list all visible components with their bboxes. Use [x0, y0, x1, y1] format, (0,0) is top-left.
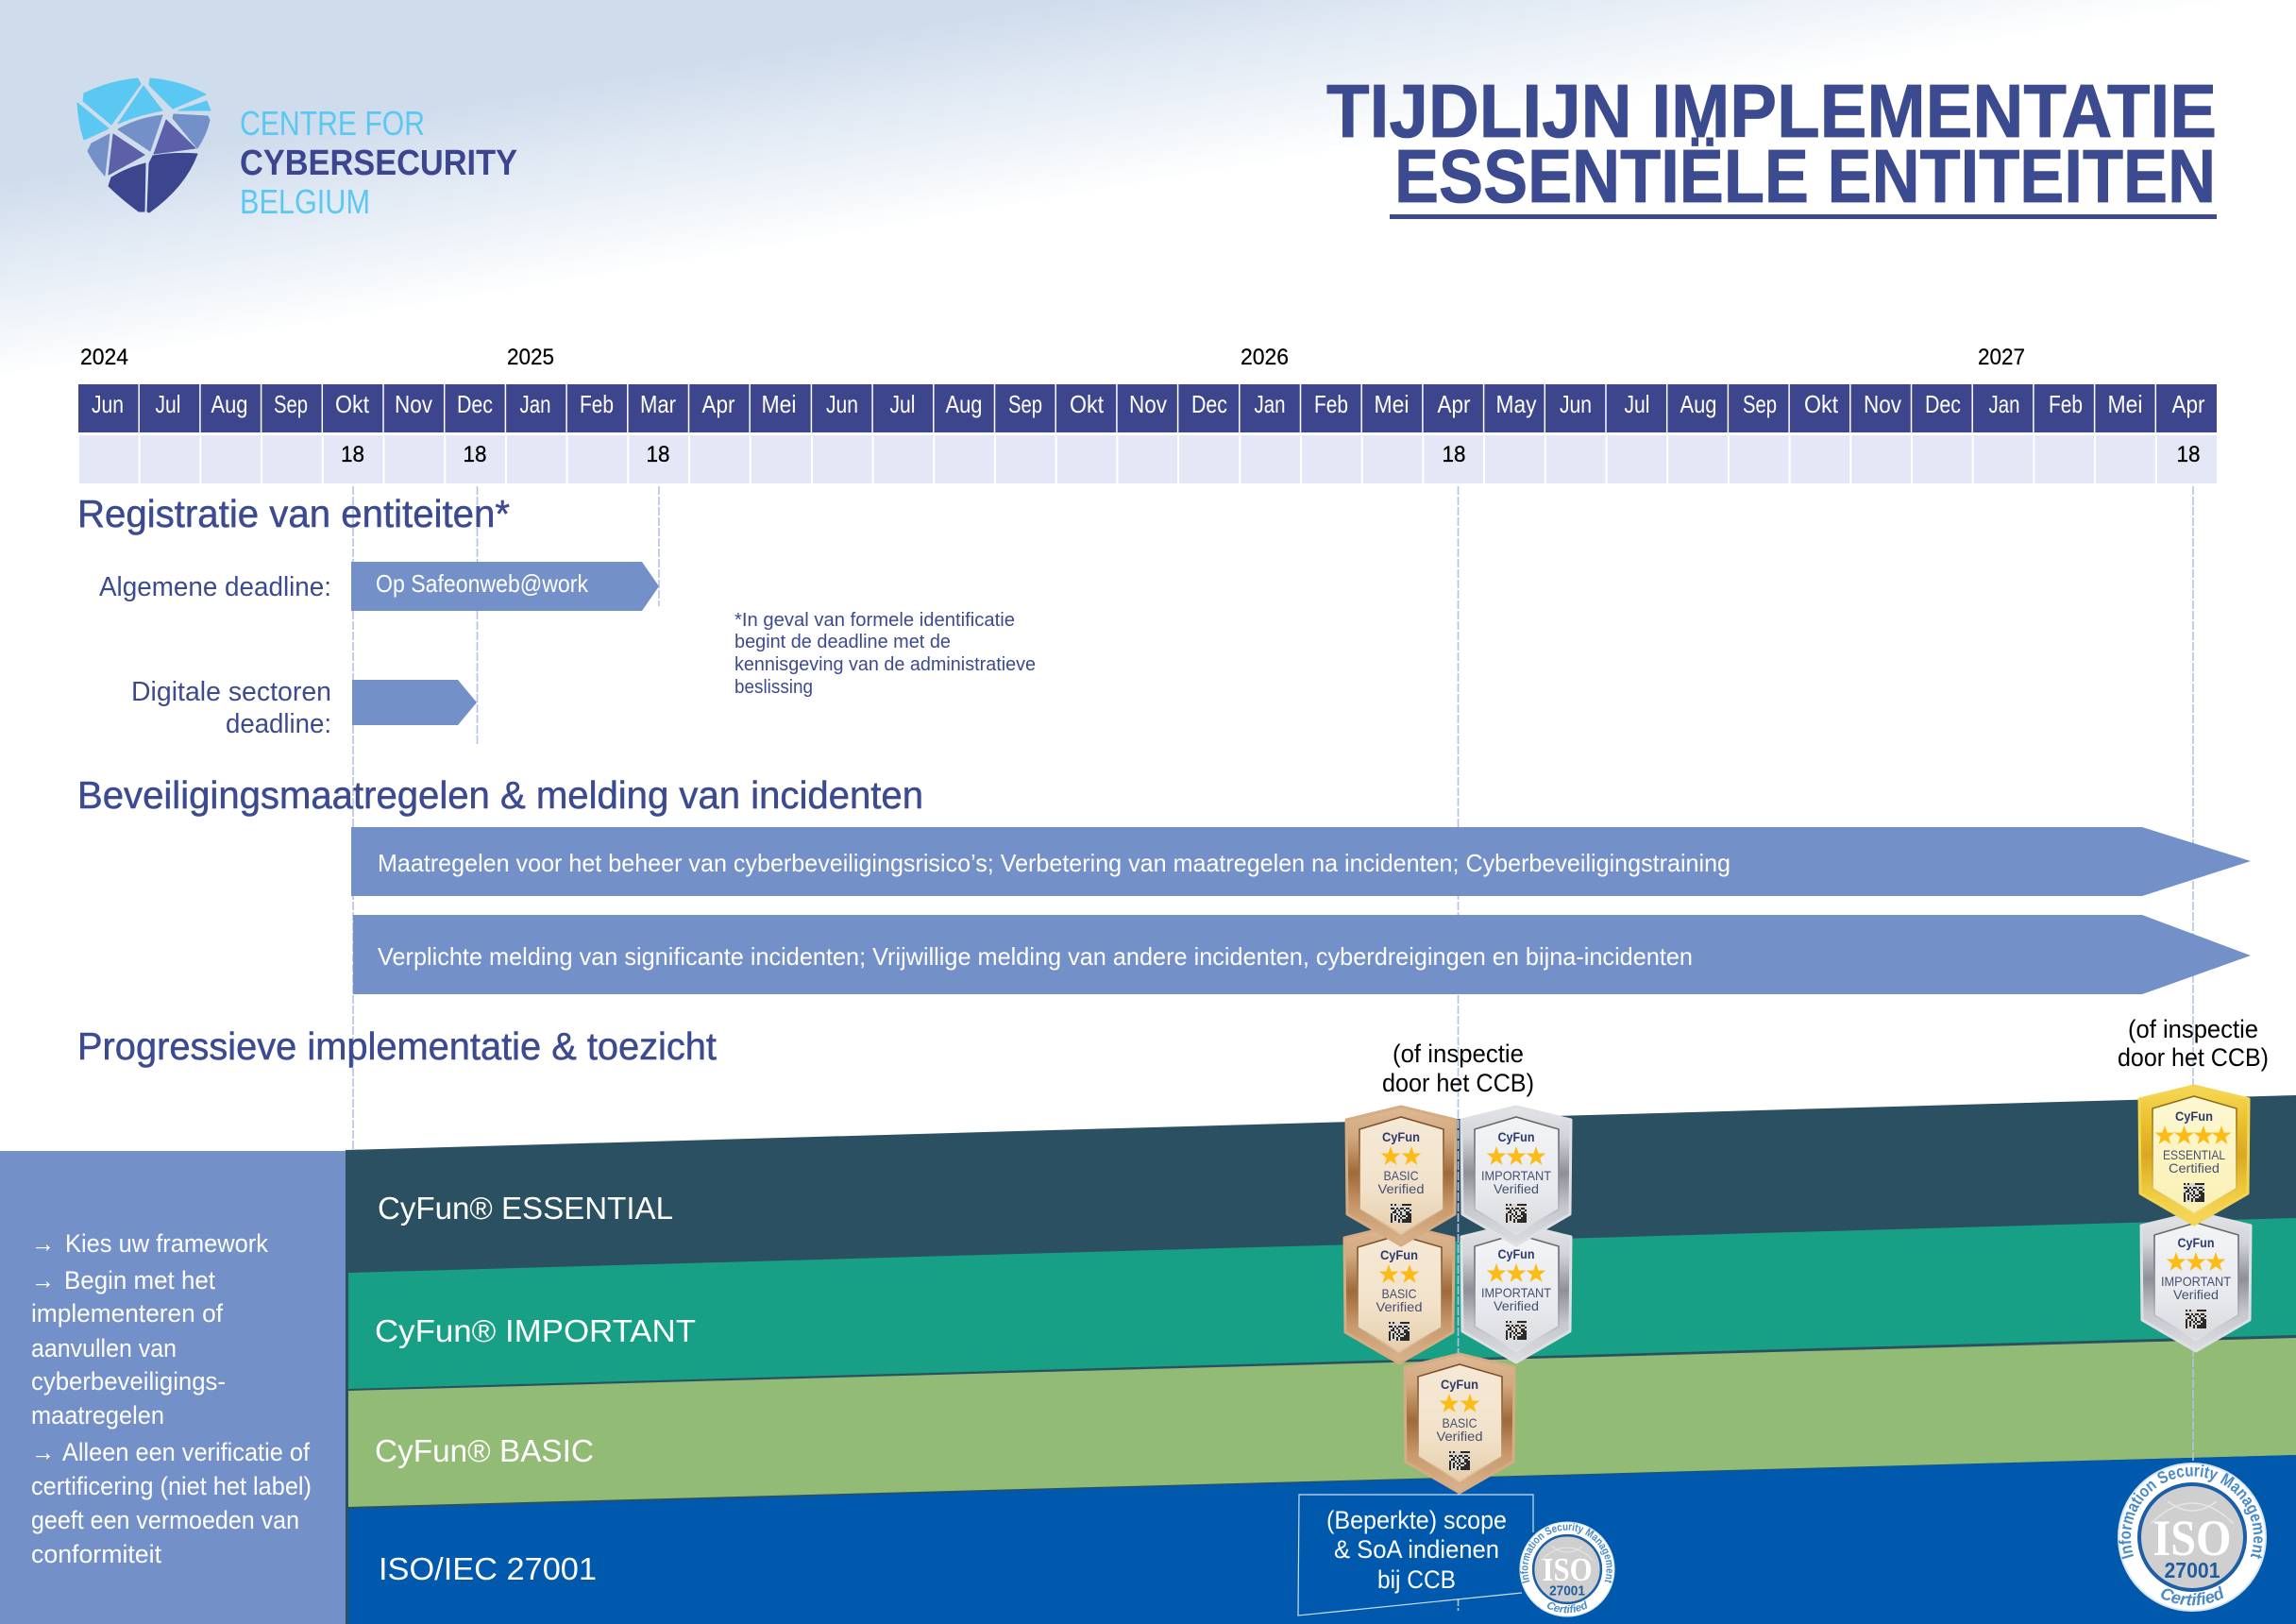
month header row: Apr	[702, 390, 735, 418]
arrow label: Op Safeonweb@work	[376, 569, 589, 598]
left panel text: aanvullen van	[31, 1334, 177, 1362]
badge: basic in essential band	[1346, 1107, 1456, 1245]
bands block: cyfun levels and ISO	[0, 1095, 2296, 1624]
title	[1326, 69, 2217, 219]
callout: scope indienen	[1298, 1495, 1533, 1616]
month header row: Feb	[580, 390, 614, 418]
month header row: Sep	[274, 390, 308, 418]
badge: essential 2027: ESSENTIAL	[2163, 1147, 2225, 1162]
badge: basic in important band: Verified	[1376, 1299, 1422, 1314]
month header row: Mei	[1375, 390, 1409, 418]
arrow: maatregelen	[351, 827, 2251, 896]
left panel text: →	[31, 1229, 55, 1258]
badge: basic in important band: BASIC	[1382, 1286, 1416, 1301]
badge: important 2027: CyFun	[2177, 1235, 2215, 1250]
ISO seal small: Certified	[1547, 1599, 1588, 1613]
callout: scope indienen: & SoA indienen	[1334, 1535, 1499, 1564]
arrow text: melding: Verplichte melding van significante incidenten; Vrijwillige melding van andere incidenten, cyberdreigingen en bijna-incidenten	[378, 942, 1693, 971]
month header row: Nov	[1864, 390, 1901, 418]
month header row: Sep	[1008, 390, 1042, 418]
ISO seal small: 27001	[1549, 1584, 1585, 1599]
badge: important in essential band: Verified	[1494, 1181, 1539, 1196]
month header row: Aug	[946, 390, 982, 418]
month header row: Apr	[1437, 390, 1471, 418]
ISO seal small: ISO	[1542, 1552, 1593, 1588]
year labels: 2025	[507, 345, 554, 370]
badge: basic in essential band: Verified	[1378, 1181, 1424, 1196]
band label: basic: CyFun® BASIC	[375, 1433, 594, 1468]
badge: important in essential band	[1461, 1107, 1571, 1245]
footnote: *In geval van formele identificatie	[734, 610, 1015, 631]
badge: basic in essential band: BASIC	[1384, 1168, 1418, 1183]
badge: essential 2027: CyFun	[2175, 1108, 2213, 1124]
left panel text: Kies uw framework	[65, 1229, 268, 1258]
badge: important in important band: CyFun	[1497, 1246, 1535, 1261]
background gradient header	[0, 0, 2231, 375]
date row: 18	[463, 442, 487, 467]
ISO seal small	[1519, 1522, 1615, 1616]
date row	[79, 435, 2217, 483]
month header row: May	[1495, 390, 1537, 418]
footnote: kennisgeving van de administratieve	[734, 654, 1036, 675]
band label: essential: CyFun® ESSENTIAL	[378, 1191, 673, 1226]
month header row: Mar	[640, 390, 676, 418]
badge: important in important band	[1461, 1224, 1571, 1362]
ISO seal large	[2118, 1463, 2267, 1612]
footnote	[734, 610, 1036, 698]
note: of inspectie 2026: door het CCB)	[1382, 1069, 1534, 1097]
label: algemene deadline: Algemene deadline:	[99, 572, 331, 602]
ISO seal large: 27001	[2164, 1558, 2220, 1582]
month header row: Jun	[92, 390, 124, 418]
band label: iso: ISO/IEC 27001	[379, 1551, 597, 1586]
badge: important in essential band: CyFun	[1497, 1129, 1535, 1144]
heading: registratie: Registratie van entiteiten*	[77, 492, 510, 535]
left panel text: certificering (niet het label)	[31, 1472, 312, 1500]
deadline guide lines	[353, 486, 2193, 1611]
band label: important: CyFun® IMPORTANT	[375, 1313, 696, 1348]
date row: 18	[1443, 442, 1465, 467]
month header row: Aug	[211, 390, 247, 418]
ISO seal large: Certified	[2161, 1585, 2224, 1605]
month header row: Dec	[457, 390, 493, 418]
month header row: Jul	[1624, 390, 1650, 418]
month header row: Jan	[1254, 390, 1286, 418]
month header row: Mei	[2107, 390, 2143, 418]
note: of inspectie 2026	[1382, 1040, 1534, 1097]
heading: beveiligingsmaatregelen: Beveiligingsmaatregelen & melding van incidenten	[77, 773, 923, 817]
icon: shield logo	[77, 78, 211, 212]
date row: 18	[646, 442, 670, 467]
note: of inspectie 2026: (of inspectie	[1393, 1040, 1524, 1068]
month header row: Jun	[826, 390, 858, 418]
month header row: Feb	[2049, 390, 2083, 418]
month header row: Apr	[2171, 390, 2205, 418]
badge: basic in important band: CyFun	[1380, 1247, 1418, 1262]
month header row: Nov	[1129, 390, 1167, 418]
callout: scope indienen: bij CCB	[1377, 1565, 1456, 1594]
left panel text: geeft een vermoeden van	[31, 1506, 299, 1534]
band: CyFun ESSENTIAL	[346, 1095, 2296, 1624]
timeline table	[78, 384, 2217, 483]
badge: important 2027: Verified	[2173, 1287, 2219, 1302]
arrow: melding	[353, 915, 2251, 994]
label: digitale sectoren deadline: deadline:	[226, 709, 331, 739]
year labels: 2027	[1978, 345, 2025, 370]
callout: scope indienen: (Beperkte) scope	[1326, 1506, 1507, 1534]
badge: important in important band: Verified	[1494, 1298, 1539, 1313]
left panel text: maatregelen	[31, 1401, 164, 1429]
note: of inspectie 2027: door het CCB)	[2118, 1043, 2269, 1072]
band: ISO/IEC 27001	[348, 1455, 2296, 1624]
month header row: Jan	[1988, 390, 2020, 418]
badge: basic in basic band: Verified	[1437, 1429, 1482, 1444]
month header row: Jul	[889, 390, 916, 418]
badge: basic in basic band	[1405, 1354, 1514, 1493]
ISO seal large: ISO	[2152, 1510, 2232, 1566]
left panel text: Begin met het	[64, 1266, 215, 1294]
badge: essential 2027: Certified	[2169, 1160, 2220, 1176]
month header row: Dec	[1925, 390, 1961, 418]
label: digitale sectoren deadline	[131, 677, 331, 739]
ISO seal large: Information Security Management	[2119, 1464, 2263, 1560]
month header row: Jan	[519, 390, 551, 418]
badge: basic in basic band: CyFun	[1441, 1377, 1478, 1392]
badge: important in important band: IMPORTANT	[1481, 1285, 1551, 1300]
footnote: begint de deadline met de	[734, 632, 951, 652]
date row: 18	[341, 442, 364, 467]
badge: important 2027: IMPORTANT	[2161, 1274, 2231, 1289]
ISO seal small: Information Security Management	[1520, 1522, 1612, 1583]
arrow: algemene deadline	[351, 562, 659, 611]
left panel text	[31, 1229, 312, 1568]
month header row: Dec	[1191, 390, 1227, 418]
month header row: Jun	[1560, 390, 1592, 418]
band: CyFun BASIC	[348, 1338, 2296, 1507]
title underline	[1390, 214, 2217, 219]
arrow text: maatregelen: Maatregelen voor het beheer van cyberbeveiligingsrisico’s; Verbetering van maatregelen na incidenten; Cyberbeveiligingstraining	[378, 849, 1730, 877]
left panel text: →	[31, 1438, 55, 1466]
label: digitale sectoren deadline: Digitale sectoren	[131, 677, 331, 707]
month header row: Okt	[335, 390, 370, 418]
year labels: 2024	[80, 345, 128, 370]
month header row: Jul	[155, 390, 181, 418]
arrow: digitale sectoren	[352, 680, 477, 725]
logo text: cybersecurity: CYBERSECURITY	[240, 144, 517, 183]
month header row	[78, 384, 2217, 432]
badge: basic in important band	[1344, 1225, 1454, 1363]
month header row: Okt	[1070, 390, 1105, 418]
logo text: centre for: CENTRE FOR	[240, 104, 425, 143]
badge: important 2027	[2141, 1212, 2251, 1351]
footnote: beslissing	[734, 677, 813, 698]
left panel text: →	[31, 1266, 55, 1294]
badge: basic in essential band: CyFun	[1382, 1129, 1420, 1144]
badge: basic in basic band: BASIC	[1443, 1415, 1477, 1430]
month header row: Sep	[1743, 390, 1777, 418]
year labels: 2026	[1241, 345, 1289, 370]
heading: progressieve implementatie: Progressieve implementatie & toezicht	[77, 1024, 718, 1068]
title line 1: TIJDLIJN IMPLEMENTATIE	[1326, 69, 2217, 153]
left panel background	[0, 1151, 346, 1624]
left panel text: Alleen een verificatie of	[62, 1438, 310, 1466]
badge: important in essential band: IMPORTANT	[1481, 1168, 1551, 1183]
logo: Centre for Cybersecurity Belgium	[77, 78, 517, 221]
badge: essential 2027	[2139, 1086, 2249, 1225]
band: CyFun IMPORTANT	[348, 1218, 2296, 1389]
left panel text: conformiteit	[31, 1540, 161, 1568]
year labels	[80, 345, 2025, 370]
month header row: Mei	[761, 390, 797, 418]
month header row: Aug	[1680, 390, 1716, 418]
month header row: Nov	[395, 390, 432, 418]
month header row: Okt	[1804, 390, 1839, 418]
date row: 18	[2177, 442, 2200, 467]
month header row: Feb	[1314, 390, 1348, 418]
left panel text: cyberbeveiligings-	[31, 1367, 226, 1396]
note: of inspectie 2027	[2118, 1015, 2269, 1072]
logo text: belgium: BELGIUM	[240, 182, 370, 221]
note: of inspectie 2027: (of inspectie	[2128, 1015, 2258, 1043]
left panel text: implementeren of	[31, 1299, 223, 1328]
